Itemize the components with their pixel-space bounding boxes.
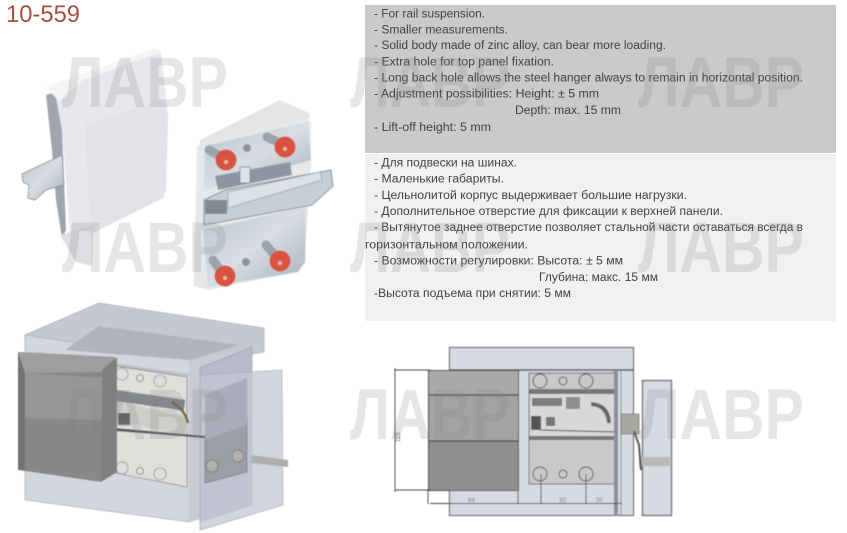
- panel: English specifications: [365, 5, 836, 153]
- text block: English feature list: - Extra hole for top panel fixation.: [374, 56, 554, 68]
- text block: Russian feature list: - Вытянутое заднее отверстие позволяет стальной части оставаться всегда в: [374, 222, 803, 234]
- text block: English feature list: - For rail suspension.: [374, 8, 485, 20]
- text block: English feature list: [374, 8, 803, 134]
- illustration: white clip, front view: [22, 48, 168, 266]
- watermarks: ЛАВР logo repeated: ЛАВР: [638, 376, 804, 455]
- icon: steel stems of adjusters: [209, 137, 282, 274]
- text block: English feature list: Depth: max. 15 mm: [515, 105, 621, 117]
- icon: red adjuster knobs: [214, 136, 296, 286]
- dimension labels: 115: [396, 432, 402, 442]
- dimension labels: [396, 432, 603, 504]
- text block: English feature list: - Solid body made of zinc alloy, can bear more loading.: [374, 40, 666, 52]
- watermarks: ЛАВР logo repeated: ЛАВР: [638, 209, 804, 288]
- text block: Russian feature list: - Для подвески на шинах.: [374, 158, 517, 170]
- panel: Russian specifications: [365, 154, 836, 321]
- watermarks: ЛАВР logo repeated: ЛАВР: [62, 44, 228, 123]
- dimension lines: [395, 368, 622, 504]
- dimension labels: 32: [559, 498, 566, 504]
- text block: Russian feature list: - Маленькие габариты.: [374, 174, 504, 186]
- watermarks: ЛАВР logo repeated: ЛАВР: [62, 209, 228, 288]
- watermarks: ЛАВР logo repeated: ЛАВР: [62, 376, 228, 455]
- text block: Russian feature list: Глубина: макс. 15 мм: [539, 272, 658, 284]
- illustration: clip, rear view with red adjusters: [194, 100, 333, 290]
- dimension labels: 64: [468, 498, 475, 504]
- text block: Russian feature list: горизонтальном положении.: [365, 240, 528, 252]
- watermarks: ЛАВР logo repeated: ЛАВР: [350, 209, 510, 288]
- watermarks: ЛАВР logo repeated: ЛАВР: [638, 44, 804, 123]
- text block: Russian feature list: - Возможности регулировки: Высота: ± 5 мм: [374, 256, 623, 268]
- text block: English feature list: - Long back hole allows the steel hanger always to remain in horizontal position.: [374, 72, 803, 84]
- text block: Russian feature list: - Цельнолитой корпус выдерживает большие нагрузки.: [374, 190, 687, 202]
- text block: English feature list: - Lift-off height: 5 mm: [374, 122, 491, 134]
- text block: English feature list: - Smaller measurements.: [374, 24, 508, 36]
- dimension labels: 20: [596, 498, 603, 504]
- illustration: dimensioned side drawing: [395, 348, 672, 516]
- title: product code: 10-559: [6, 1, 80, 28]
- text block: Russian feature list: -Высота подъема при снятии: 5 мм: [374, 288, 571, 300]
- text block: Russian feature list: [365, 158, 803, 300]
- watermarks: ЛАВР logo repeated: [62, 44, 804, 455]
- watermarks: ЛАВР logo repeated: ЛАВР: [350, 44, 510, 123]
- watermarks: ЛАВР logo repeated: ЛАВР: [350, 376, 510, 455]
- text block: Russian feature list: - Дополнительное отверстие для фиксации к верхней панели.: [374, 206, 723, 218]
- text block: English feature list: - Adjustment possibilities: Height: ± 5 mm: [374, 88, 599, 100]
- illustration: 3D assembly view: [18, 303, 288, 530]
